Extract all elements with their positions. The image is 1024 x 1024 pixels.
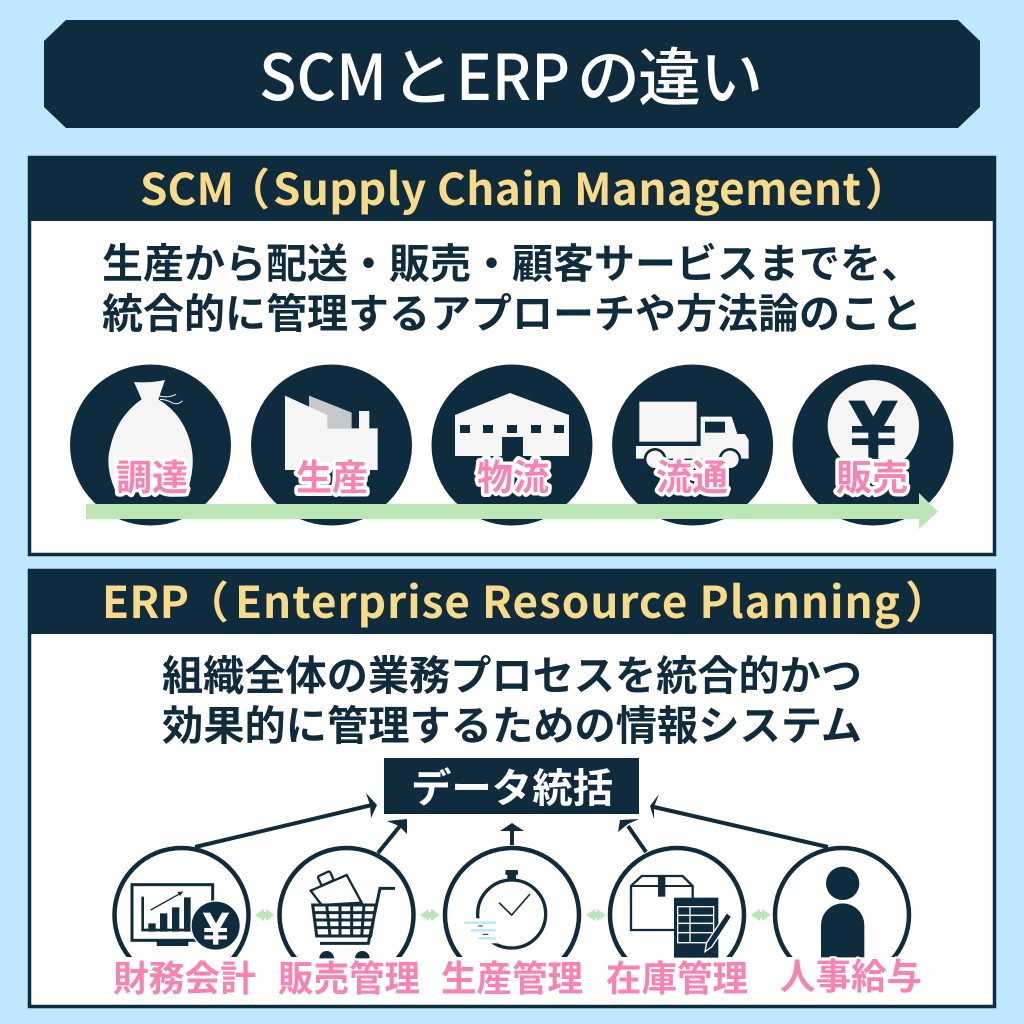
step: logistics — [432, 364, 592, 526]
title banner — [44, 20, 980, 128]
SCM header: ） — [865, 154, 909, 218]
ERP header — [28, 567, 996, 634]
module: sales management — [278, 848, 420, 1002]
label: 調達 — [116, 449, 188, 501]
SCM description: 生産から配送・販売・顧客サービスまでを、 — [102, 230, 922, 290]
title banner: の — [577, 28, 640, 119]
step: sales — [792, 364, 954, 526]
icon: person — [821, 867, 864, 957]
title banner: ERP — [456, 28, 570, 119]
icon: stopwatch — [463, 870, 546, 948]
icon: warehouse — [455, 393, 569, 457]
small two-way arrows — [255, 909, 771, 921]
ERP header: （ — [185, 567, 229, 631]
flow arrow — [86, 493, 938, 529]
label: 人事給与 — [780, 948, 922, 1000]
module: finance — [113, 848, 256, 1002]
icon: truck — [636, 402, 749, 471]
ERP header: Enterprise Resource Planning — [235, 567, 900, 631]
ERP description: 効果的に管理するための情報システム — [162, 692, 862, 752]
title banner: SCM — [259, 28, 387, 119]
label: 生産管理 — [441, 950, 583, 1002]
label: 在庫管理 — [606, 950, 748, 1002]
step: procurement — [70, 364, 231, 526]
title banner: い — [700, 28, 763, 119]
icon: chart monitor with yen — [132, 885, 240, 950]
icon: sack — [108, 380, 193, 490]
arrows to hub — [195, 793, 828, 853]
data hub box: データ統括 — [411, 756, 613, 814]
module: production management — [441, 848, 583, 1002]
ERP header: ERP — [102, 567, 189, 631]
icon: shopping cart — [311, 871, 395, 958]
step: distribution — [612, 364, 773, 526]
ERP header: ） — [905, 567, 949, 631]
SCM header: Supply Chain Management — [273, 154, 861, 218]
ERP description — [162, 642, 862, 752]
module: inventory management — [606, 848, 748, 1002]
SCM header: （ — [226, 154, 270, 218]
SCM header — [28, 154, 996, 221]
label: 物流 — [477, 449, 549, 501]
SCM header: SCM — [140, 154, 234, 218]
title banner: 違 — [638, 28, 701, 119]
label: 財務会計 — [113, 950, 256, 1002]
label: 流通 — [656, 449, 728, 501]
panel: ERP — [28, 567, 996, 1006]
label: 販売管理 — [278, 950, 420, 1002]
label: 販売 — [836, 449, 908, 501]
title banner: と — [391, 28, 454, 119]
SCM description: 統合的に管理するアプローチや方法論のこと — [102, 280, 922, 340]
SCM description — [102, 230, 922, 340]
ERP description: 組織全体の業務プロセスを統合的かつ — [162, 642, 862, 702]
panel: SCM — [28, 154, 996, 554]
label: 生産 — [296, 449, 368, 501]
icon: box and document — [631, 876, 732, 958]
module: HR and payroll — [775, 848, 922, 1000]
icon: yen coin — [828, 380, 919, 471]
icon: factory — [285, 396, 378, 470]
step: production — [251, 364, 412, 526]
